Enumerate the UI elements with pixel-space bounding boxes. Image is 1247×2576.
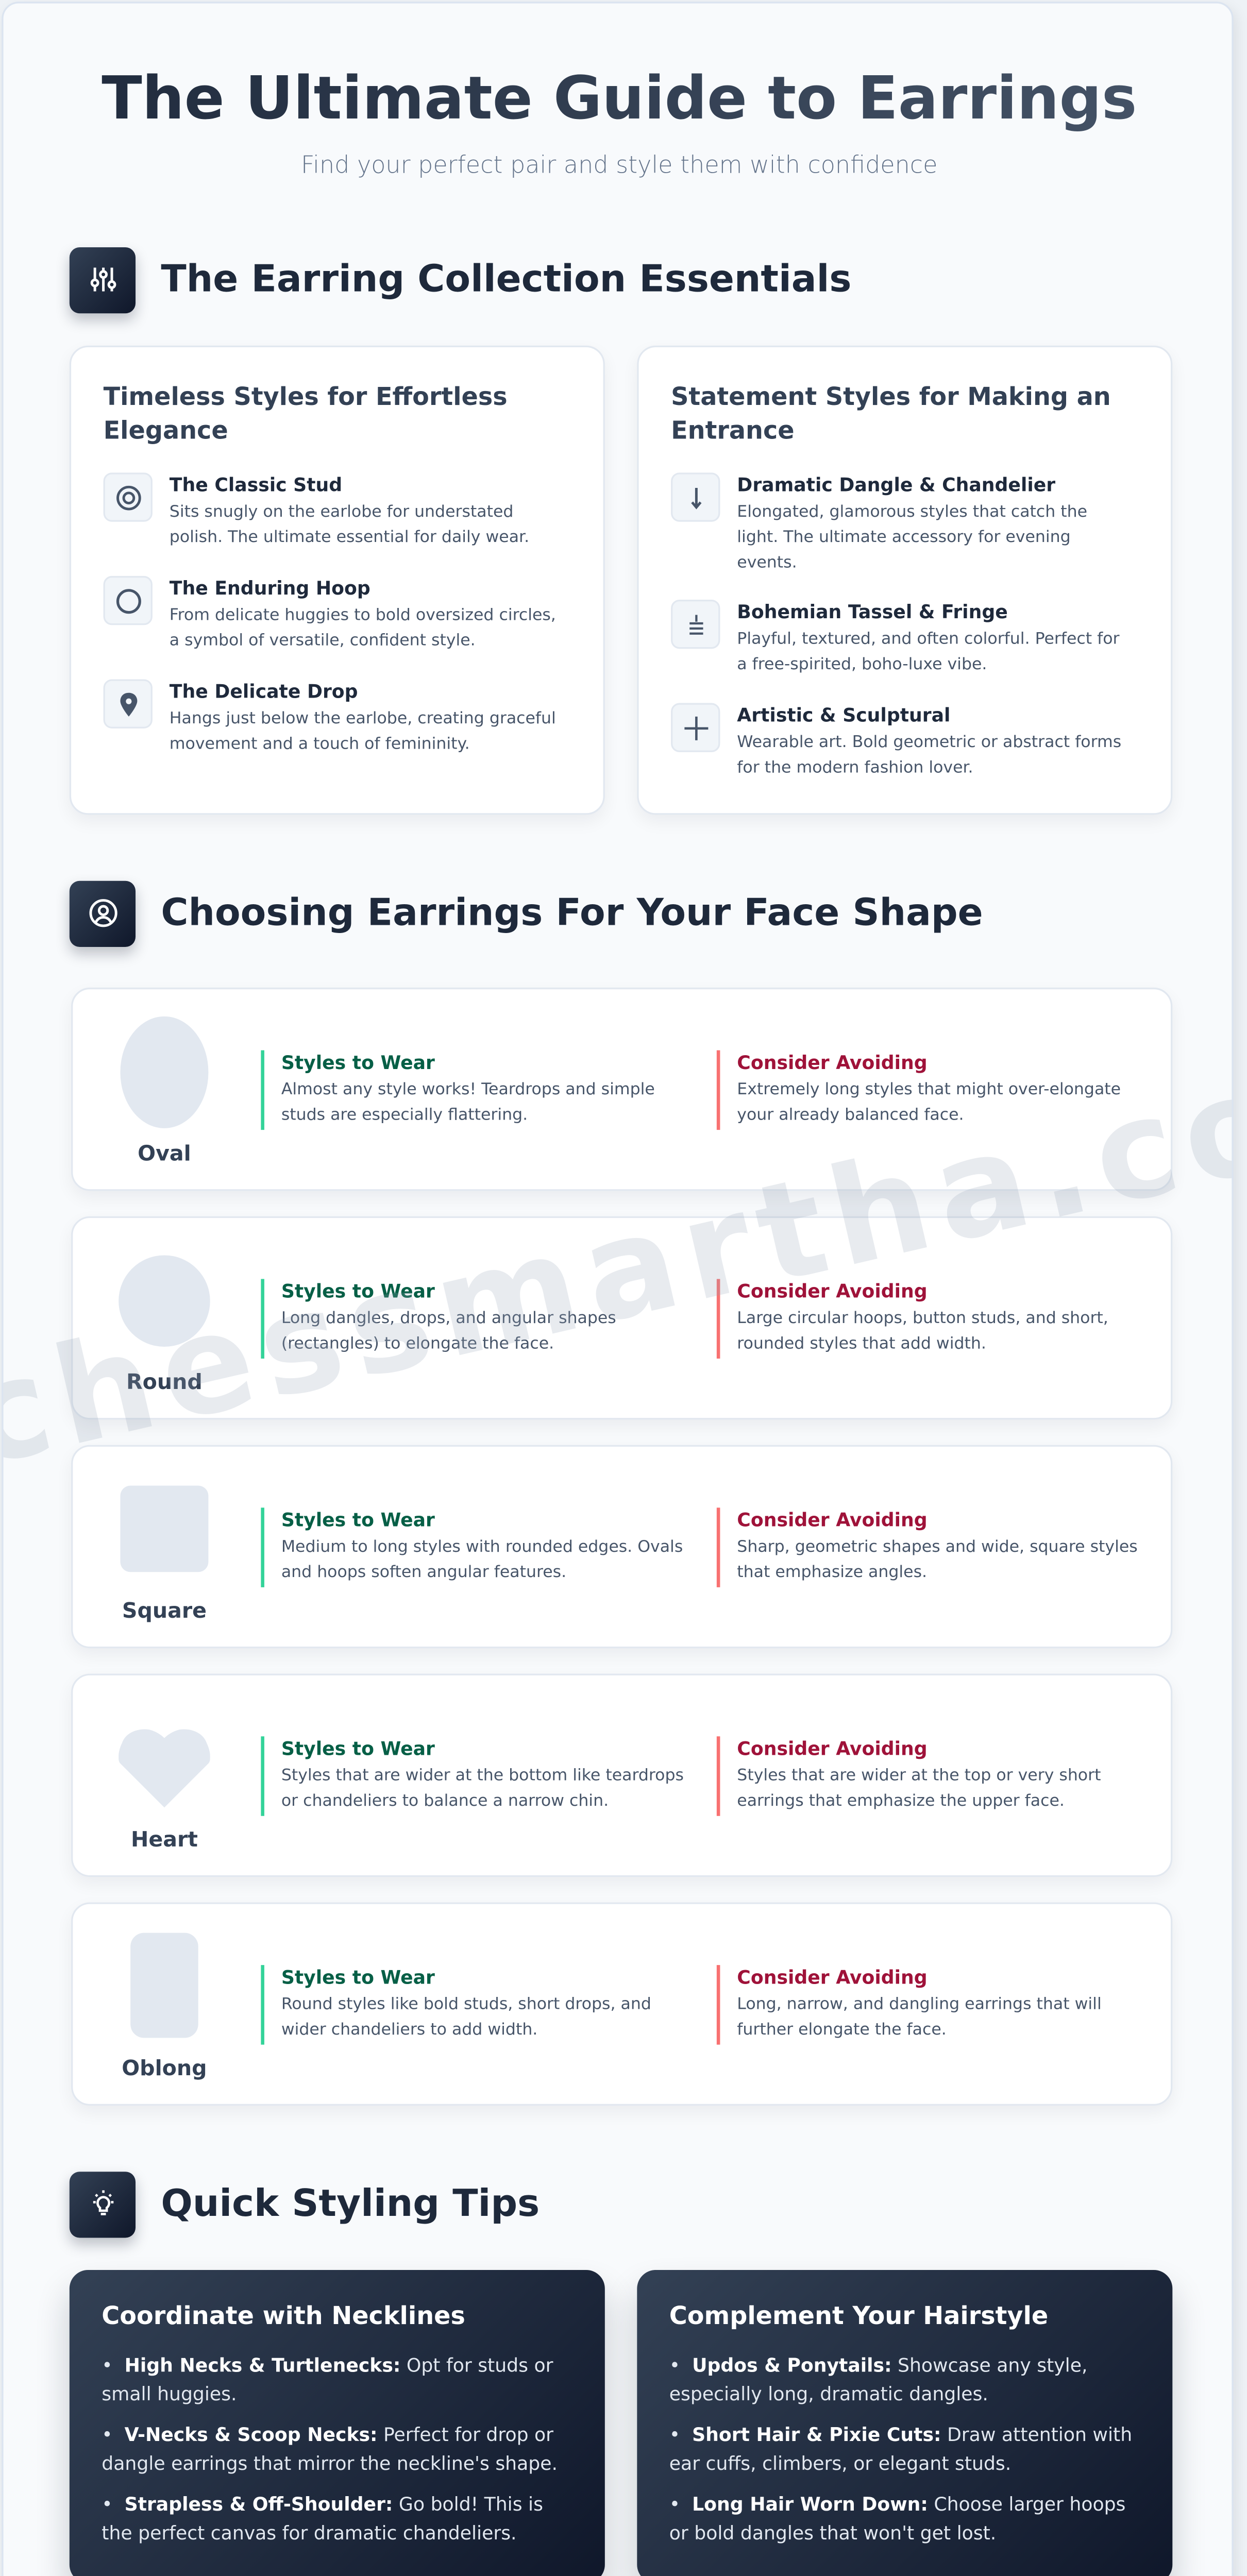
item: tassel	[671, 600, 1120, 674]
styles to wear	[261, 1736, 695, 1816]
styles to wear	[261, 1279, 695, 1359]
panel: statement styles: Wearable art. Bold geometric or abstract forms for the modern fashion lover.	[737, 734, 1121, 777]
panel: timeless styles: The Enduring Hoop	[170, 578, 370, 600]
styles to wear: Styles that are wider at the bottom like teardrops or chandeliers to balance a narrow chin.	[281, 1767, 684, 1811]
consider avoiding: Large circular hoops, button studs, and short, rounded styles that add width.	[737, 1310, 1108, 1353]
item: dangle	[671, 473, 1087, 572]
shape: oval	[120, 1016, 208, 1128]
panel: statement styles: Statement Styles for Making an Entrance	[671, 384, 1111, 446]
icon: face	[70, 880, 136, 946]
panel: necklines: • V-Necks & Scoop Necks: Perfect for drop or dangle earrings that mirror the neckline's shape.	[102, 2424, 558, 2475]
panel: statement styles	[637, 346, 1172, 815]
panel: square face: Square	[122, 1598, 207, 1623]
panel: necklines: • Strapless & Off-Shoulder: Go bold! This is the perfect canvas for dramatic chandeliers.	[102, 2494, 543, 2545]
section header: collection essentials	[62, 247, 851, 328]
panel: square face	[71, 1445, 1172, 1648]
styles to wear	[261, 1965, 695, 2045]
panel: timeless styles: The Delicate Drop	[170, 681, 358, 703]
consider avoiding: Consider Avoiding	[737, 1281, 928, 1303]
panel: necklines: Coordinate with Necklines	[102, 2304, 465, 2331]
consider avoiding	[717, 1507, 1160, 1587]
consider avoiding	[717, 1050, 1160, 1130]
panel: statement styles: Bohemian Tassel & Fringe	[737, 601, 1008, 623]
panel: timeless styles: Sits snugly on the earlobe for understated polish. The ultimate essential for daily wear.	[170, 503, 529, 547]
panel: hairstyle: Complement Your Hairstyle	[669, 2304, 1048, 2331]
title: The Ultimate Guide to Earrings	[102, 66, 1137, 134]
consider avoiding: Consider Avoiding	[737, 1738, 928, 1760]
shape: square	[120, 1486, 208, 1572]
panel: timeless styles: Hangs just below the earlobe, creating graceful movement and a touch of femininity.	[170, 710, 556, 754]
panel: necklines: • High Necks & Turtlenecks: Opt for studs or small huggies.	[102, 2354, 553, 2405]
consider avoiding: Extremely long styles that might over-elongate your already balanced face.	[737, 1081, 1121, 1125]
panel: statement styles: Artistic & Sculptural	[737, 705, 950, 727]
section header: face shape: Choosing Earrings For Your Face Shape	[161, 892, 983, 934]
icon: sliders	[70, 246, 136, 313]
section header: collection essentials: The Earring Collection Essentials	[161, 258, 851, 301]
panel: oblong face: Oblong	[122, 2055, 207, 2080]
consider avoiding: Styles that are wider at the top or very short earrings that emphasize the upper face.	[737, 1767, 1101, 1811]
section header: styling tips: Quick Styling Tips	[161, 2183, 540, 2225]
panel: oblong face	[71, 1902, 1172, 2106]
styles to wear: Styles to Wear	[281, 1510, 435, 1531]
styles to wear: Styles to Wear	[281, 1738, 435, 1760]
shape: circle	[119, 1255, 210, 1347]
panel: hairstyle	[637, 2270, 1172, 2576]
subtitle: Find your perfect pair and style them with confidence	[301, 152, 937, 180]
consider avoiding	[717, 1965, 1160, 2045]
shape: heart	[119, 1729, 210, 1807]
panel: timeless styles: Timeless Styles for Effortless Elegance	[104, 384, 508, 446]
panel: necklines	[70, 2270, 605, 2576]
panel: oval face	[71, 988, 1172, 1191]
section header: face shape	[62, 880, 983, 961]
consider avoiding: Consider Avoiding	[737, 1510, 928, 1531]
styles to wear	[261, 1050, 695, 1130]
item: classic stud	[103, 473, 529, 547]
styles to wear: Styles to Wear	[281, 1052, 435, 1074]
styles to wear: Long dangles, drops, and angular shapes (rectangles) to elongate the face.	[281, 1310, 616, 1353]
panel: heart face: Heart	[131, 1826, 198, 1852]
panel: heart face	[71, 1674, 1172, 1877]
panel: timeless styles: The Classic Stud	[170, 474, 342, 496]
styles to wear: Round styles like bold studs, short drops, and wider chandeliers to add width.	[281, 1995, 651, 2040]
styles to wear: Styles to Wear	[281, 1281, 435, 1303]
item: sculptural	[671, 703, 1121, 777]
panel: round face: Round	[126, 1369, 203, 1394]
panel: hairstyle: • Long Hair Worn Down: Choose larger hoops or bold dangles that won't get lost.	[669, 2494, 1125, 2545]
panel: timeless styles: From delicate huggies to bold oversized circles, a symbol of versatile, confident style.	[170, 606, 556, 651]
panel: hairstyle: • Updos & Ponytails: Showcase any style, especially long, dramatic dangles.	[669, 2354, 1088, 2405]
styles to wear: Almost any style works! Teardrops and simple studs are especially flattering.	[281, 1081, 655, 1125]
item: enduring hoop	[103, 576, 556, 651]
consider avoiding: Consider Avoiding	[737, 1967, 928, 1989]
item: delicate drop	[103, 679, 556, 754]
styles to wear: Styles to Wear	[281, 1967, 435, 1989]
consider avoiding	[717, 1279, 1160, 1359]
panel: timeless styles	[70, 346, 605, 815]
section header: styling tips	[62, 2171, 540, 2252]
panel: statement styles: Dramatic Dangle & Chandelier	[737, 474, 1055, 496]
panel: statement styles: Elongated, glamorous styles that catch the light. The ultimate accessory for evening events.	[737, 503, 1087, 572]
shape: oblong	[130, 1933, 198, 2038]
consider avoiding: Consider Avoiding	[737, 1052, 928, 1074]
consider avoiding: Sharp, geometric shapes and wide, square styles that emphasize angles.	[737, 1538, 1138, 1582]
panel: round face	[71, 1216, 1172, 1419]
styles to wear	[261, 1507, 695, 1587]
panel: statement styles: Playful, textured, and often colorful. Perfect for a free-spirited, boho-luxe vibe.	[737, 630, 1120, 674]
consider avoiding	[717, 1736, 1160, 1816]
styles to wear: Medium to long styles with rounded edges. Ovals and hoops soften angular features.	[281, 1538, 683, 1582]
panel: oval face: Oval	[138, 1140, 191, 1165]
icon: lightbulb	[70, 2171, 136, 2237]
consider avoiding: Long, narrow, and dangling earrings that will further elongate the face.	[737, 1995, 1102, 2040]
panel: hairstyle: • Short Hair & Pixie Cuts: Draw attention with ear cuffs, climbers, or elegant studs.	[669, 2424, 1132, 2475]
